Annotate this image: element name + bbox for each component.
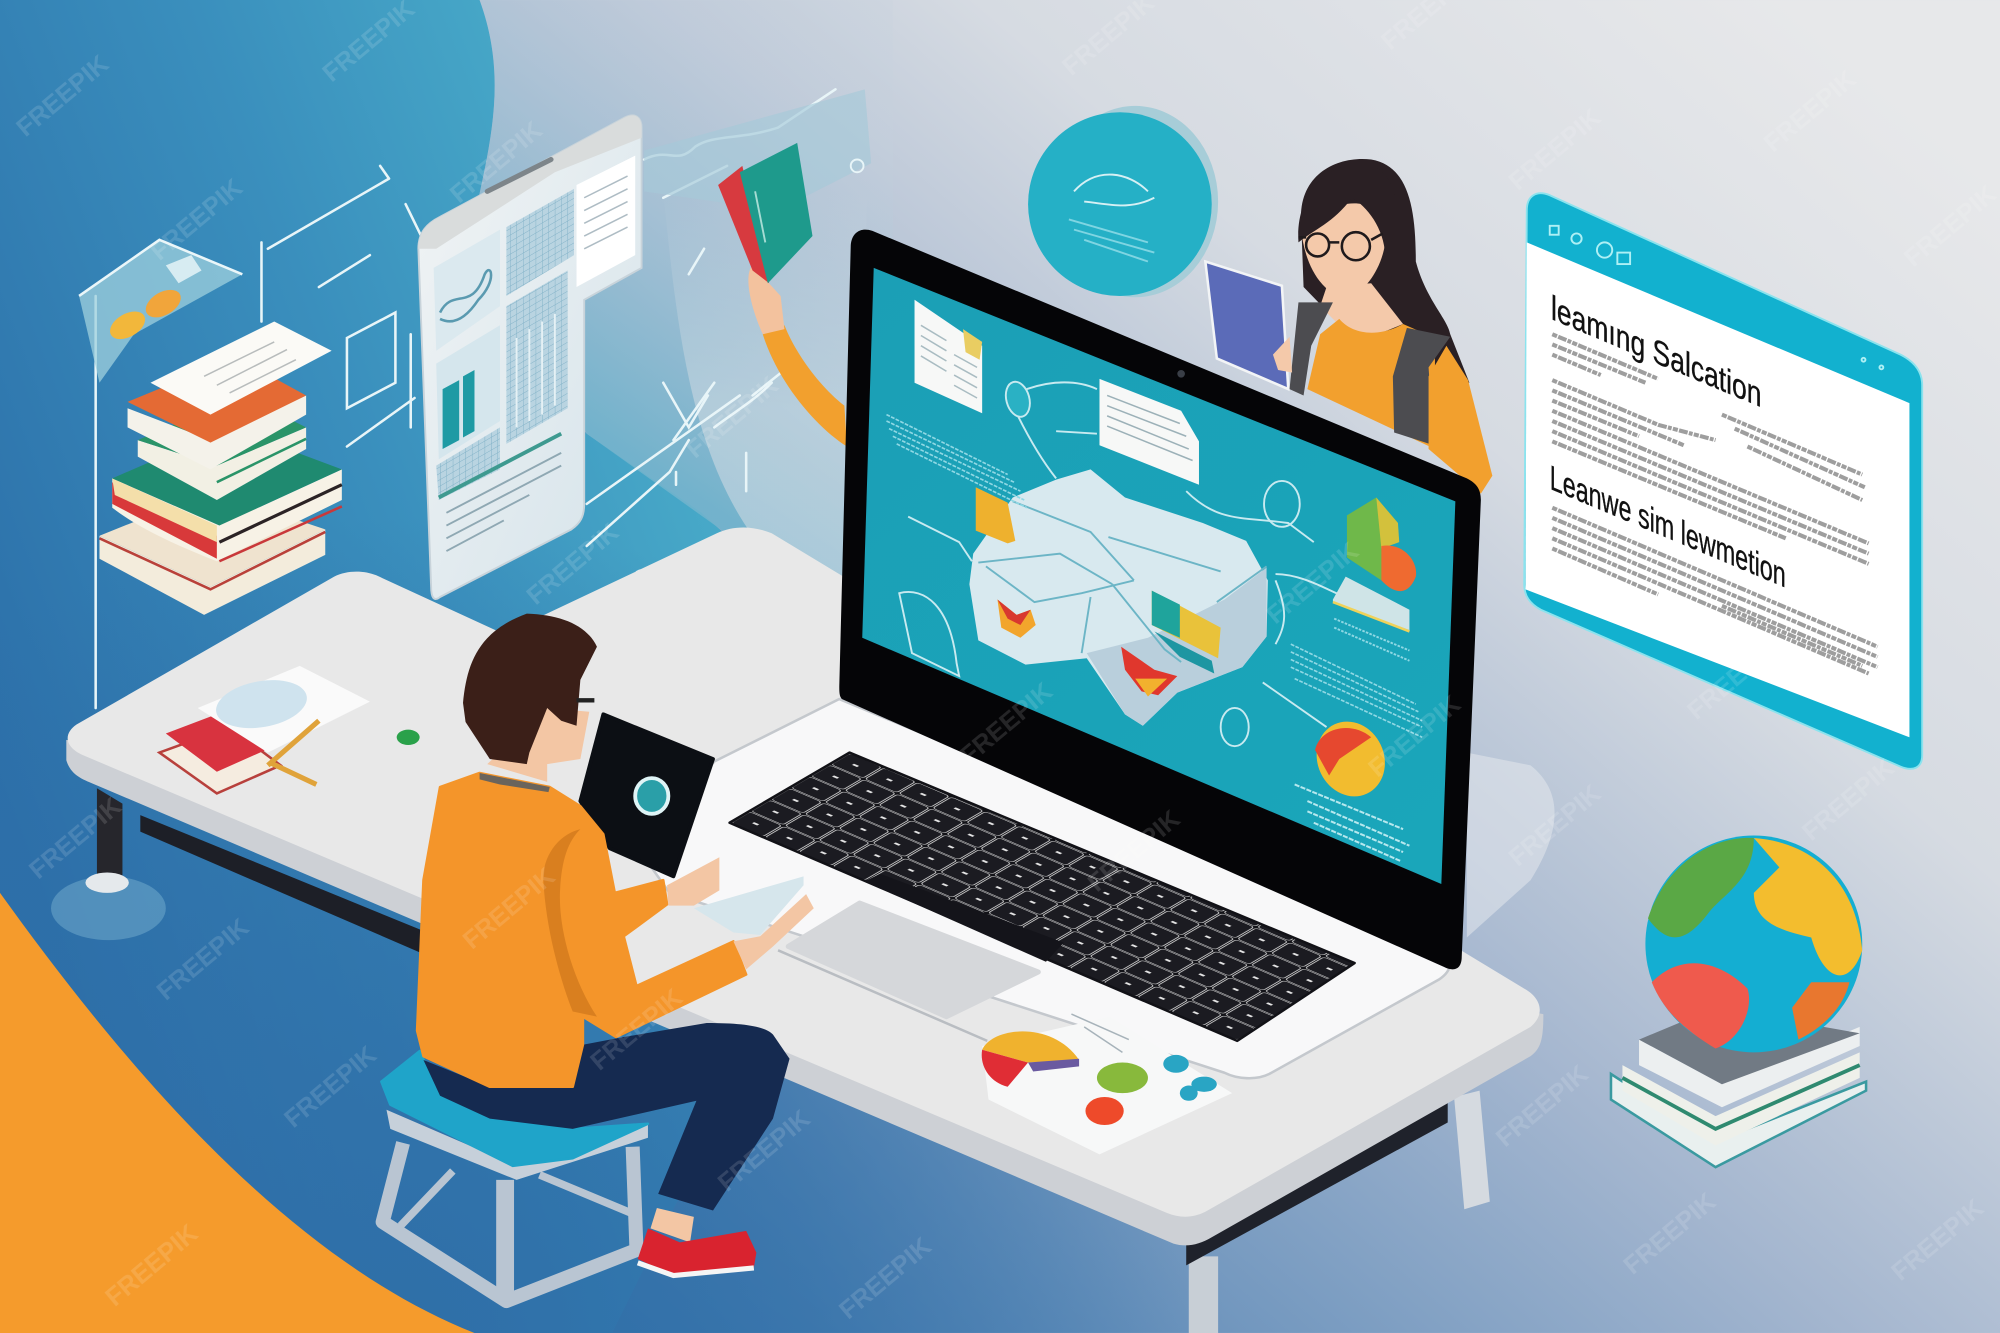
space bar — [865, 874, 1064, 962]
books under globe — [1611, 1008, 1866, 1167]
student with glasses and tablet, behind laptop — [1205, 159, 1492, 494]
floating card, left — [79, 240, 242, 383]
red and cream book — [112, 427, 342, 561]
watermarks: FREEPIK — [1619, 1187, 1722, 1280]
screen caption lines — [1295, 784, 1409, 861]
raised arm holding book — [718, 143, 847, 446]
face — [1301, 203, 1386, 299]
stool seat — [381, 1051, 648, 1166]
desk — [51, 527, 1543, 1333]
tablet table panel — [506, 270, 568, 444]
globe on books — [1611, 836, 1866, 1167]
window frame — [1524, 193, 1922, 769]
shirt — [1307, 319, 1435, 449]
body text block 2 — [1552, 508, 1878, 674]
orange book — [128, 357, 306, 469]
orange corner — [0, 893, 474, 1333]
window toolbar icons — [1550, 226, 1883, 369]
blue curved area — [0, 0, 867, 1333]
land masses — [1648, 838, 1754, 937]
desk top — [68, 527, 1540, 1217]
small tablet — [580, 714, 713, 876]
hand — [748, 265, 784, 334]
tablet text side — [577, 156, 635, 287]
tablet chart panel — [434, 230, 500, 351]
watermarks: FREEPIK — [522, 518, 625, 611]
translucent desk glow — [1467, 753, 1555, 938]
sleeve — [1429, 346, 1492, 494]
floating diagram lines — [96, 89, 835, 708]
screen teal and yellow tile — [1152, 591, 1221, 674]
front leg — [1189, 1256, 1218, 1333]
watermarks: FREEPIK — [834, 1232, 937, 1325]
watermarks: FREEPIK — [1363, 690, 1467, 783]
tablet lower grid — [436, 427, 500, 500]
desk side — [66, 740, 1543, 1245]
laptop base — [638, 699, 1450, 1078]
stool frame — [383, 1143, 640, 1301]
teal floating circle — [1028, 106, 1218, 297]
bottom book — [99, 491, 325, 615]
base front lip — [778, 950, 987, 1041]
watermarks: FREEPIK — [1504, 103, 1607, 196]
chart sheet on desk — [982, 1014, 1232, 1154]
keyboard — [730, 753, 1355, 1041]
globe sphere — [1645, 836, 1862, 1052]
laptop camera — [1177, 370, 1185, 378]
watermarks: FREEPIK — [1797, 754, 1900, 846]
sweater — [417, 773, 746, 1087]
screen yellow chart — [976, 487, 1015, 543]
skin neck — [1320, 283, 1403, 338]
floating translucent card, top right of tablet — [644, 89, 871, 211]
left leg — [97, 788, 122, 883]
watermarks: FREEPIK — [11, 50, 114, 142]
trousers — [423, 1023, 790, 1211]
screen connector lines — [899, 379, 1339, 746]
book — [159, 727, 281, 793]
right leg — [1454, 1091, 1490, 1209]
tablet grid panel — [506, 189, 574, 296]
hair — [463, 614, 597, 764]
tablet top bar — [418, 115, 642, 249]
tablet logo — [635, 778, 668, 814]
green dot — [397, 730, 420, 745]
watermarks: FREEPIK — [681, 371, 784, 464]
collar — [480, 773, 550, 792]
left hand — [667, 857, 719, 906]
right hand — [733, 894, 814, 969]
paper, book and pencil on desk — [159, 666, 420, 793]
watermarks: FREEPIK — [1083, 805, 1186, 897]
book stack, left — [99, 321, 342, 615]
screen map — [969, 469, 1268, 726]
left strap — [1290, 302, 1333, 395]
screen document 2 — [1099, 379, 1199, 485]
hand — [1273, 337, 1292, 372]
tablet green rule and footer text lines — [439, 434, 561, 497]
lower blue glow — [0, 510, 1276, 1333]
screen top-right pie — [1347, 497, 1416, 591]
screen text lines left — [886, 415, 1027, 508]
watermarks: FREEPIK — [445, 116, 548, 209]
leg foot — [85, 872, 129, 893]
sweater shade — [543, 829, 597, 1017]
watermarks: FREEPIK — [1261, 537, 1364, 630]
shoe — [638, 1228, 756, 1276]
heading 1: leamıng Salcation — [1551, 287, 1761, 415]
body text block 1 — [1552, 334, 1869, 564]
watermarks: FREEPIK — [152, 913, 255, 1006]
watermarks: FREEPIK — [1886, 1194, 1989, 1287]
screen text lines right — [1291, 644, 1422, 737]
paper in hand — [694, 876, 804, 935]
watermarks: FREEPIK — [458, 862, 561, 955]
floating document tablet — [418, 115, 642, 599]
hair — [1301, 159, 1469, 383]
window page — [1526, 242, 1909, 737]
watermarks: FREEPIK — [1682, 632, 1785, 725]
right strap — [1393, 328, 1450, 445]
screen bottom pie — [1305, 710, 1397, 808]
underside — [1186, 1094, 1448, 1265]
stool band — [386, 1110, 648, 1180]
glasses — [1298, 233, 1383, 242]
watermarks: FREEPIK — [955, 677, 1058, 770]
paper on stack — [151, 321, 332, 415]
heading 2: Leanwe sim lewmetion — [1550, 457, 1786, 595]
laptop — [638, 230, 1481, 1078]
watermarks: FREEPIK — [24, 792, 127, 885]
floating information window — [1524, 193, 1922, 769]
arm — [763, 325, 847, 446]
seated student — [381, 614, 814, 1301]
glasses — [577, 699, 594, 702]
watermarks: FREEPIK — [101, 1219, 204, 1312]
paper — [198, 666, 370, 753]
ankle — [651, 1208, 694, 1242]
screen document 1 — [915, 300, 982, 413]
trackpad — [788, 903, 1038, 1017]
watermarks: FREEPIK — [585, 983, 688, 1076]
held tablet — [1205, 262, 1288, 389]
screen bar chart — [1333, 577, 1409, 661]
watermarks: FREEPIK — [145, 173, 248, 266]
watermarks: FREEPIK — [1491, 1060, 1594, 1153]
watermarks: FREEPIK — [279, 1041, 382, 1133]
watermarks: FREEPIK — [1504, 779, 1607, 872]
watermarks: FREEPIK — [1759, 65, 1862, 158]
laptop screen bezel — [839, 230, 1481, 969]
laptop screen — [862, 268, 1455, 884]
cross bar — [140, 815, 421, 953]
screen red markers — [997, 600, 1177, 696]
book — [718, 166, 769, 283]
watermarks: FREEPIK — [1899, 180, 2000, 272]
pencil — [268, 721, 319, 784]
middle book — [138, 395, 306, 500]
translucent light shape — [663, 191, 867, 610]
skin — [487, 708, 589, 782]
watermarks: FREEPIK — [713, 1104, 816, 1197]
tablet teal bars — [436, 325, 500, 459]
teal haze behind tablet — [474, 0, 893, 612]
leg foot shadow — [51, 876, 166, 940]
fringe — [1298, 165, 1396, 258]
